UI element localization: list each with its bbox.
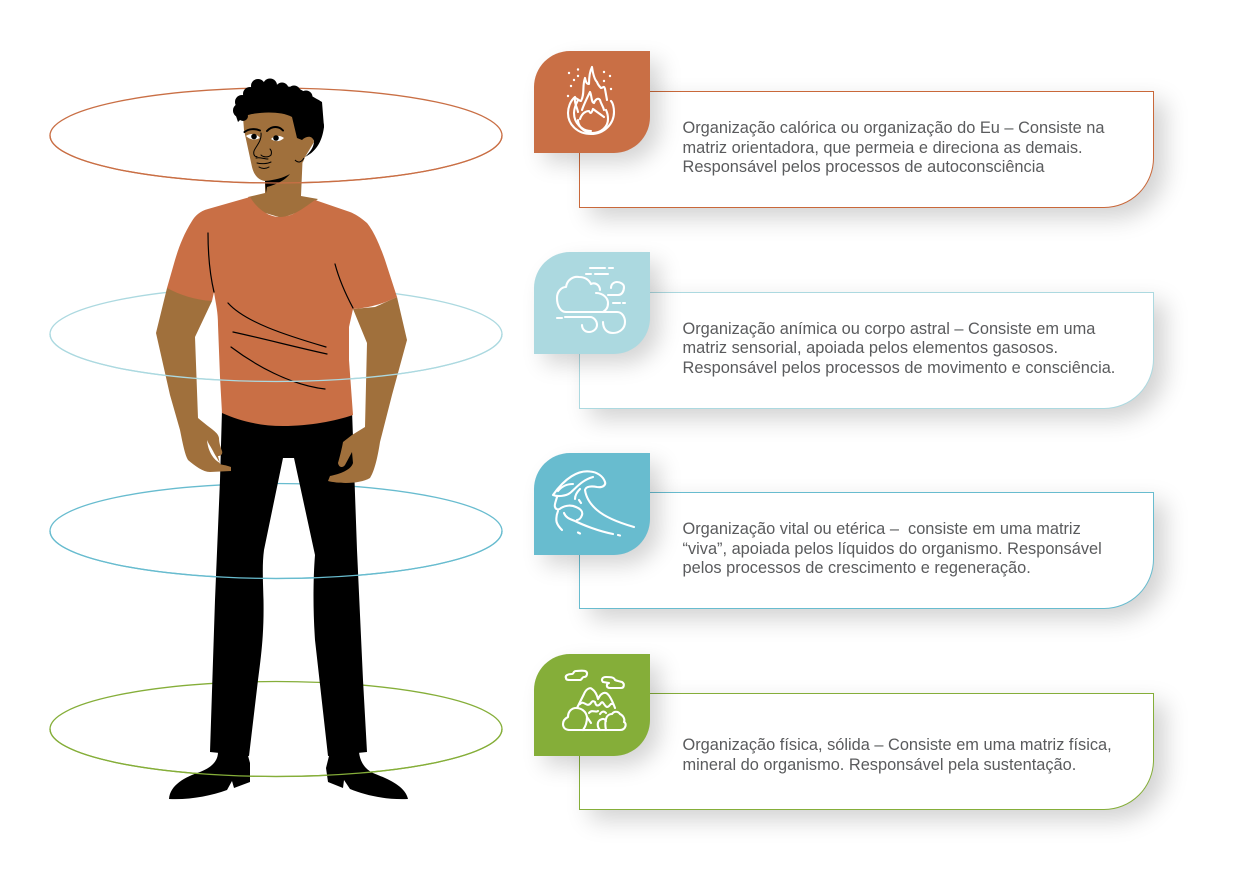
right arm bbox=[328, 297, 407, 483]
figure: person bbox=[156, 78, 408, 799]
text: organização vital bbox=[682, 520, 1102, 577]
text: organização vital: pelos processos de crescimento e regeneração. bbox=[682, 559, 1031, 577]
text: organização calórica: Organização calórica ou organização do Eu – Consiste na bbox=[682, 119, 1104, 137]
text: organização calórica: Responsável pelos processos de autoconsciência bbox=[682, 158, 1044, 176]
text: organização física bbox=[682, 736, 1112, 774]
text: organização anímica: Organização anímica ou corpo astral – Consiste em uma bbox=[682, 320, 1095, 338]
icon: mountains bbox=[563, 671, 626, 730]
panel: card anímica bbox=[579, 292, 1154, 409]
text: organização vital: “viva”, apoiada pelos líquidos do organismo. Responsável bbox=[682, 540, 1102, 558]
text: organização calórica: matriz orientadora, que permeia e direciona as demais. bbox=[682, 139, 1083, 157]
right shoe bbox=[326, 752, 408, 799]
face details bbox=[244, 127, 304, 168]
text: organização anímica: matriz sensorial, apoiada pelos elementos gasosos. bbox=[682, 339, 1058, 357]
text: organização física: mineral do organismo. Responsável pela sustentação. bbox=[682, 756, 1076, 774]
tile: mountain bbox=[534, 654, 650, 756]
ring fronts bbox=[50, 136, 502, 776]
panel: card física bbox=[579, 693, 1154, 810]
icon: wind and cloud bbox=[557, 268, 625, 333]
tile: wave bbox=[534, 453, 650, 555]
left arm bbox=[156, 288, 231, 472]
left hand gap bbox=[207, 440, 220, 463]
neck shadow bbox=[265, 174, 290, 193]
text: organização anímica: Responsável pelos processos de movimento e consciência. bbox=[682, 359, 1115, 377]
tile: fire bbox=[534, 51, 650, 153]
text: organização calórica bbox=[682, 119, 1104, 176]
t-shirt bbox=[167, 197, 397, 426]
text: organização vital: Organização vital ou etérica – consiste em uma matriz bbox=[682, 520, 1081, 538]
hair bbox=[233, 78, 324, 157]
text: organização anímica bbox=[682, 320, 1115, 377]
trousers bbox=[210, 410, 367, 756]
left shoe bbox=[169, 752, 250, 799]
icon: wave bbox=[553, 471, 634, 536]
icon: fire bbox=[567, 67, 614, 134]
ring backs bbox=[50, 88, 502, 776]
text: organização física: Organização física, sólida – Consiste em uma matriz física, bbox=[682, 736, 1112, 754]
panel: card vital bbox=[579, 492, 1154, 609]
neck bbox=[248, 150, 318, 218]
shirt folds bbox=[208, 233, 353, 389]
head bbox=[243, 108, 314, 181]
panel: card caloric bbox=[579, 91, 1154, 208]
tile: wind bbox=[534, 252, 650, 354]
